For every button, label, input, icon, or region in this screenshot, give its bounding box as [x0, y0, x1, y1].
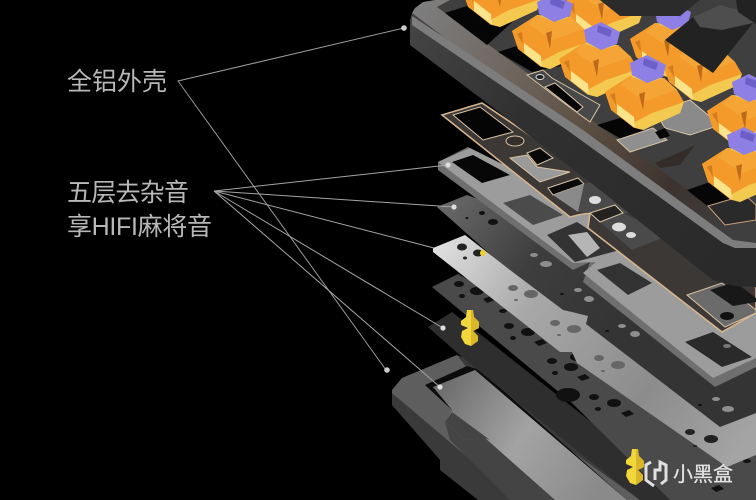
switch row front — [605, 55, 756, 202]
layer: bottom case — [392, 355, 640, 500]
layer: light aluminium plate — [438, 147, 756, 387]
case rim — [412, 0, 756, 245]
leader lines: five layers — [214, 162, 457, 390]
case side — [410, 13, 756, 287]
keycap — [600, 0, 756, 73]
layer: foam — [428, 312, 690, 500]
layer: white plate — [433, 235, 756, 467]
watermark — [646, 462, 733, 486]
case deck — [437, 0, 756, 200]
icon: yellow dot — [480, 250, 486, 256]
stabilizer pin left — [461, 310, 479, 346]
layer: dark gasket plate — [432, 274, 756, 500]
icon: watermark logo — [646, 462, 666, 486]
icon: case emblem — [655, 145, 695, 168]
label: five layer noise reduction: 五层去杂音 — [67, 179, 189, 207]
layer: grey plate — [437, 195, 756, 433]
label: five layer noise reduction — [67, 179, 212, 241]
leader lines: aluminium case — [178, 25, 407, 373]
switch row back — [462, 0, 742, 102]
watermark: 小黑盒 — [673, 463, 733, 486]
layer: PCB with gold outline — [442, 103, 756, 332]
top aluminium case — [410, 0, 756, 287]
label: aluminium case: 全铝外壳 — [67, 68, 167, 96]
label: five layer noise reduction: 享HIFI麻将音 — [67, 213, 212, 241]
switches and keycap — [462, 0, 756, 202]
stabilizer pin right — [626, 449, 644, 485]
icon: screw — [506, 136, 524, 146]
case edge band — [412, 16, 756, 248]
cutouts — [510, 148, 756, 327]
